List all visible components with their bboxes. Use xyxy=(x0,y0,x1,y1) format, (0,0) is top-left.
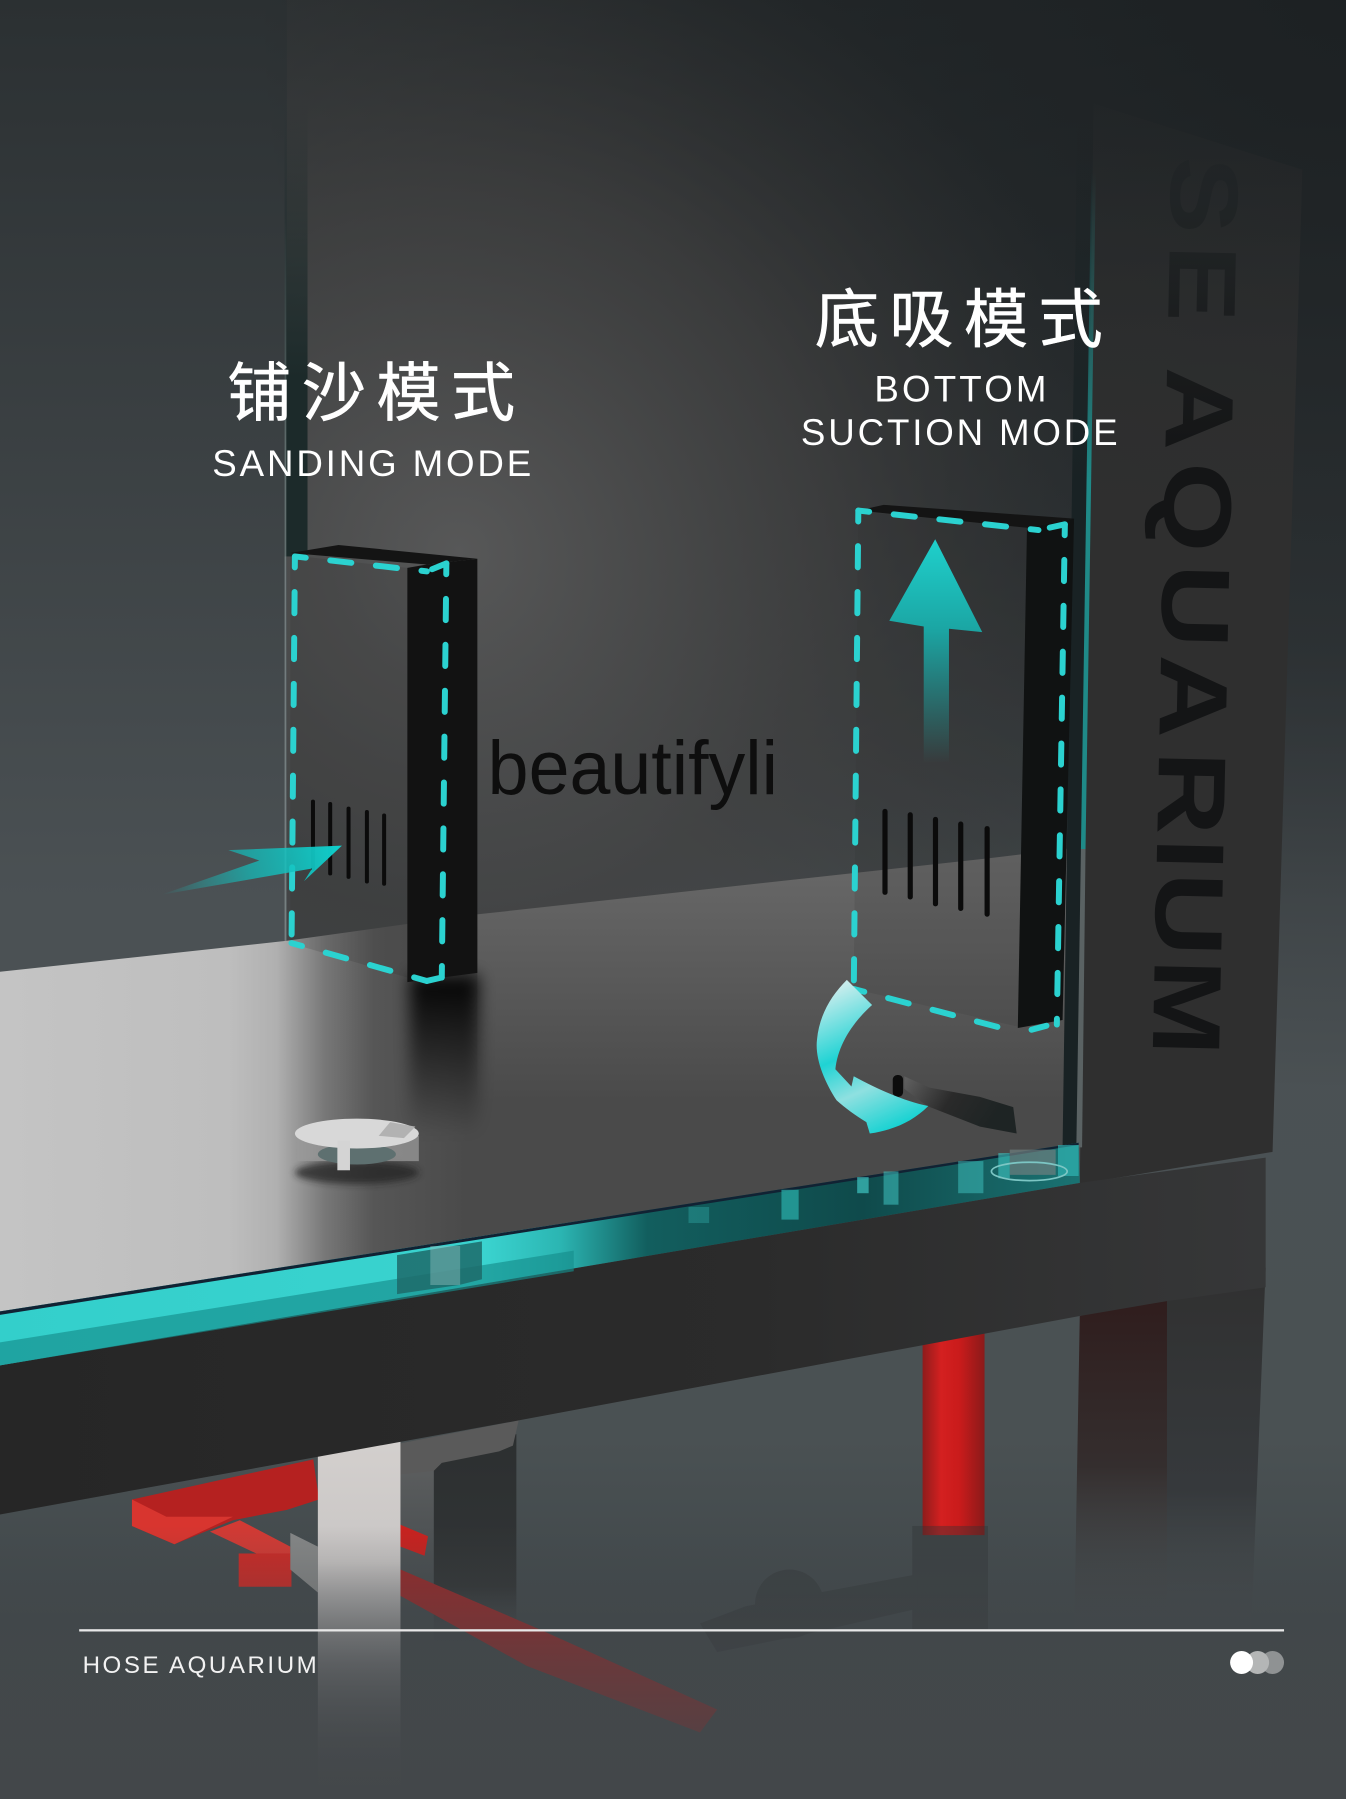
heading: bottom suction mode xyxy=(801,284,1118,453)
red tube xyxy=(923,1319,985,1535)
round feed cap xyxy=(295,1119,419,1184)
pump housing xyxy=(400,1420,519,1474)
heading: sanding mode: 铺沙模式 xyxy=(227,357,526,429)
heading: sanding mode: SANDING MODE xyxy=(212,443,531,484)
leveling screw xyxy=(991,1150,1067,1181)
teal glass edge xyxy=(0,1143,1080,1365)
left glass edge xyxy=(285,103,308,941)
arrow: curved suction xyxy=(817,980,928,1134)
aquarium floor xyxy=(0,847,1084,1311)
right glass edge xyxy=(1063,103,1096,1147)
heading: bottom suction mode: 底吸模式 xyxy=(815,284,1113,356)
right overflow box xyxy=(854,505,1074,1028)
watermark: beautifyli xyxy=(488,726,778,811)
right leg xyxy=(1074,1268,1266,1641)
right dashed outline xyxy=(854,511,1065,1033)
panel lettering: SE AQUARIUM xyxy=(1132,156,1258,1057)
pagination dots xyxy=(1230,1651,1284,1674)
footer xyxy=(79,1629,1284,1679)
box shadow on floor xyxy=(410,975,479,1136)
heading: sanding mode xyxy=(212,357,531,484)
white tube xyxy=(318,1434,400,1799)
footer brand: HOSE AQUARIUM xyxy=(83,1652,317,1679)
left dashed outline xyxy=(291,556,446,981)
left slots xyxy=(311,800,386,886)
arrow: inflow left xyxy=(161,846,342,895)
bottom fog xyxy=(0,1526,1346,1799)
rear left leg xyxy=(400,1434,516,1652)
left overflow box xyxy=(290,545,477,982)
grey hose fitting xyxy=(700,1526,988,1652)
right side panel xyxy=(1080,103,1302,1184)
arrow: upward flow xyxy=(889,539,982,763)
beam under aquarium xyxy=(0,1158,1266,1514)
heading: bottom suction mode: BOTTOM xyxy=(874,369,1047,410)
red fittings xyxy=(132,1459,717,1732)
suction device on floor xyxy=(893,1075,1017,1134)
back wall xyxy=(287,0,1147,943)
right slots xyxy=(882,809,990,917)
heading: bottom suction mode: SUCTION MODE xyxy=(801,412,1118,453)
